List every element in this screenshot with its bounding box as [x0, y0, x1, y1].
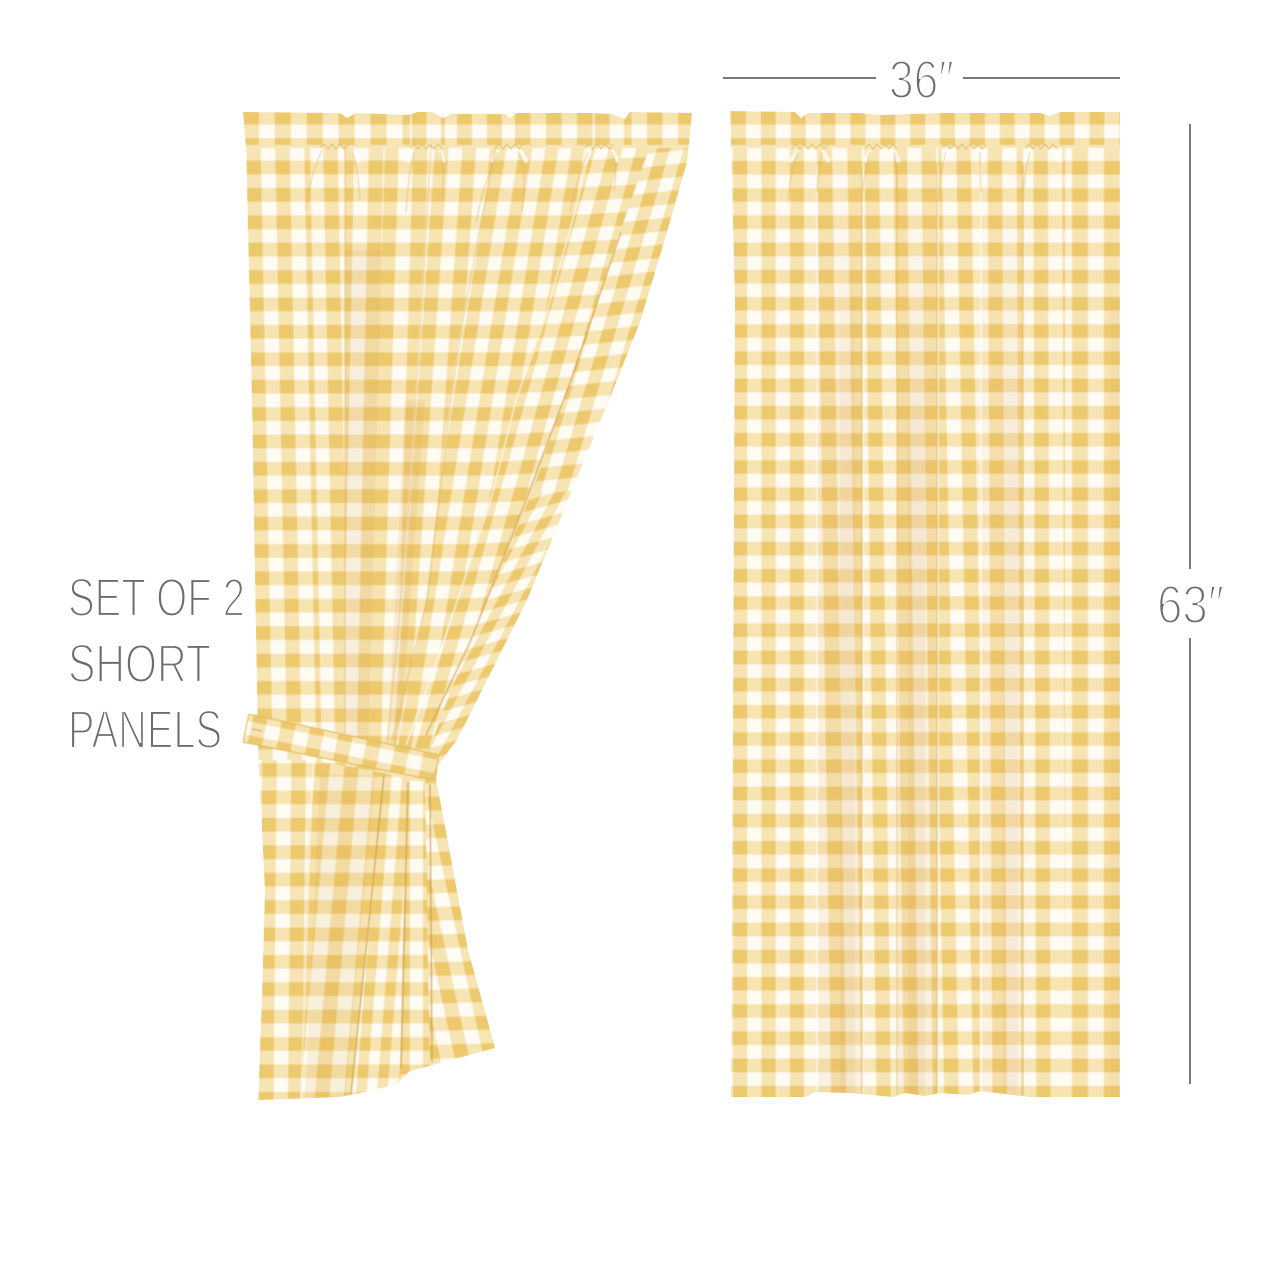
- right panel pleated body: [725, 146, 1125, 1106]
- text: set of 2 short panels: SHORT: [68, 634, 211, 694]
- upper left panel drapes: [240, 146, 700, 790]
- lower left panel drapes: [250, 760, 500, 1105]
- dimension: width 36 inches: 36″: [889, 50, 954, 110]
- right panel header ruffle: [725, 105, 1125, 202]
- left panel header ruffle: [240, 105, 695, 222]
- text: set of 2 short panels: [68, 568, 245, 760]
- dimension: height 63 inches: 63″: [1157, 575, 1224, 635]
- text: set of 2 short panels: PANELS: [68, 700, 222, 760]
- text: set of 2 short panels: SET OF 2: [68, 568, 245, 628]
- left curtain panel tied back: [240, 105, 700, 1105]
- left panel fold shading: [301, 146, 621, 1098]
- right curtain panel: [725, 105, 1125, 1106]
- tieback band: [243, 714, 439, 780]
- right panel pleat shading: [817, 160, 1120, 1100]
